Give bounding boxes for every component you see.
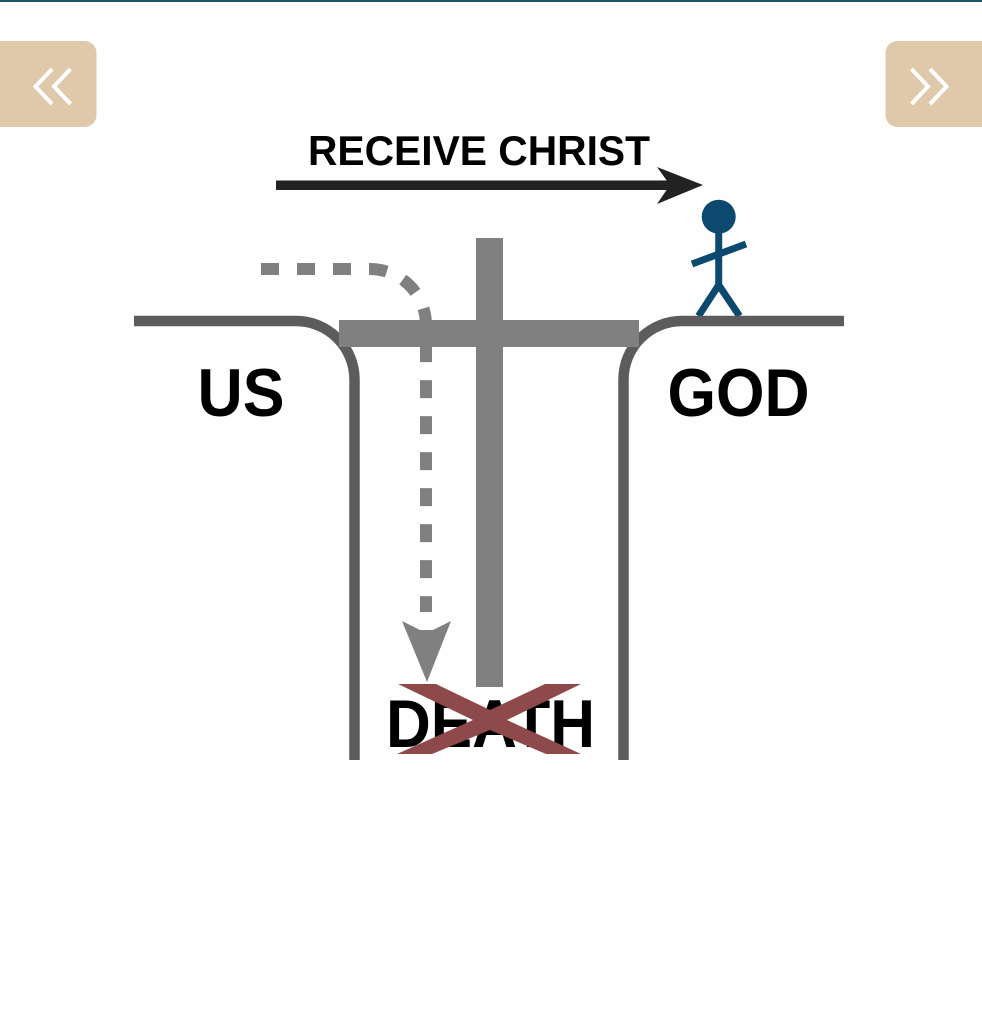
chasm: right cliff [624,321,844,760]
top border line [0,0,982,2]
crossed-out mark [397,684,581,754]
button: previous [0,41,96,127]
chasm: left cliff [134,321,354,760]
heading: receive christ: RECEIVE CHRIST [308,127,650,174]
label: death: DEATH [386,686,595,762]
label: us: US [198,355,284,431]
icon: stick figure [692,200,746,316]
dashed arrow: path to death [261,269,451,682]
cross [339,238,639,687]
arrow: receive christ [276,167,703,204]
button: next [886,41,982,127]
label: god: GOD [668,355,810,431]
